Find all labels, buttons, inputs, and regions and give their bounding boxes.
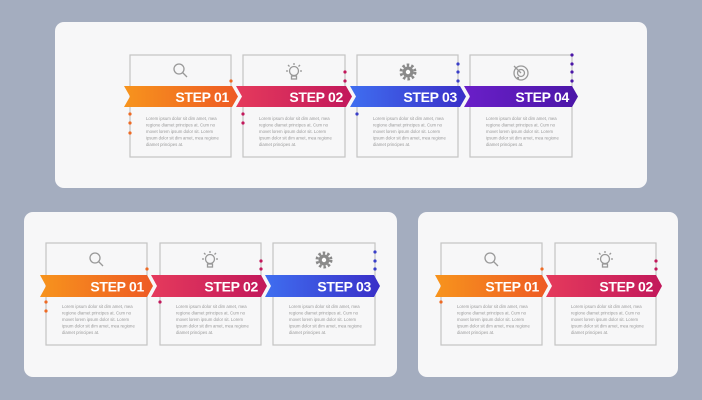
step 2 box [555,243,658,345]
arrow: step 01: STEP 01 [90,278,145,294]
arrow: step 01: STEP 01 [175,89,230,105]
arrow: step 01 [435,275,548,297]
arrow: step 03: STEP 03 [317,278,372,294]
arrow: step 02 [546,275,662,297]
panel: two steps [418,212,678,377]
arrow: step 04: STEP 04 [515,89,570,105]
arrow: step 02: STEP 02 [204,278,259,294]
arrow: step 04 [464,86,578,107]
arrow: step 01 [124,86,238,107]
arrow: step 01: STEP 01 [485,278,540,294]
arrow: step 03: STEP 03 [403,89,458,105]
step 4 box [470,53,574,157]
step 3 box [355,55,460,157]
step 2 box [158,243,263,345]
step 1 box [439,243,544,345]
arrow: step 02 [151,275,267,297]
step 1 box [128,55,233,157]
arrow: step 02: STEP 02 [289,89,344,105]
arrow: step 02: STEP 02 [599,278,654,294]
step 3 box [273,243,377,345]
arrow: step 02 [236,86,352,107]
step 1 box [44,243,149,345]
arrow: step 03 [265,275,380,297]
panel: three steps [24,212,397,377]
arrow: step 03 [350,86,466,107]
arrow: step 01 [40,275,153,297]
step 2 box [241,55,347,157]
panel: four steps [55,22,647,188]
